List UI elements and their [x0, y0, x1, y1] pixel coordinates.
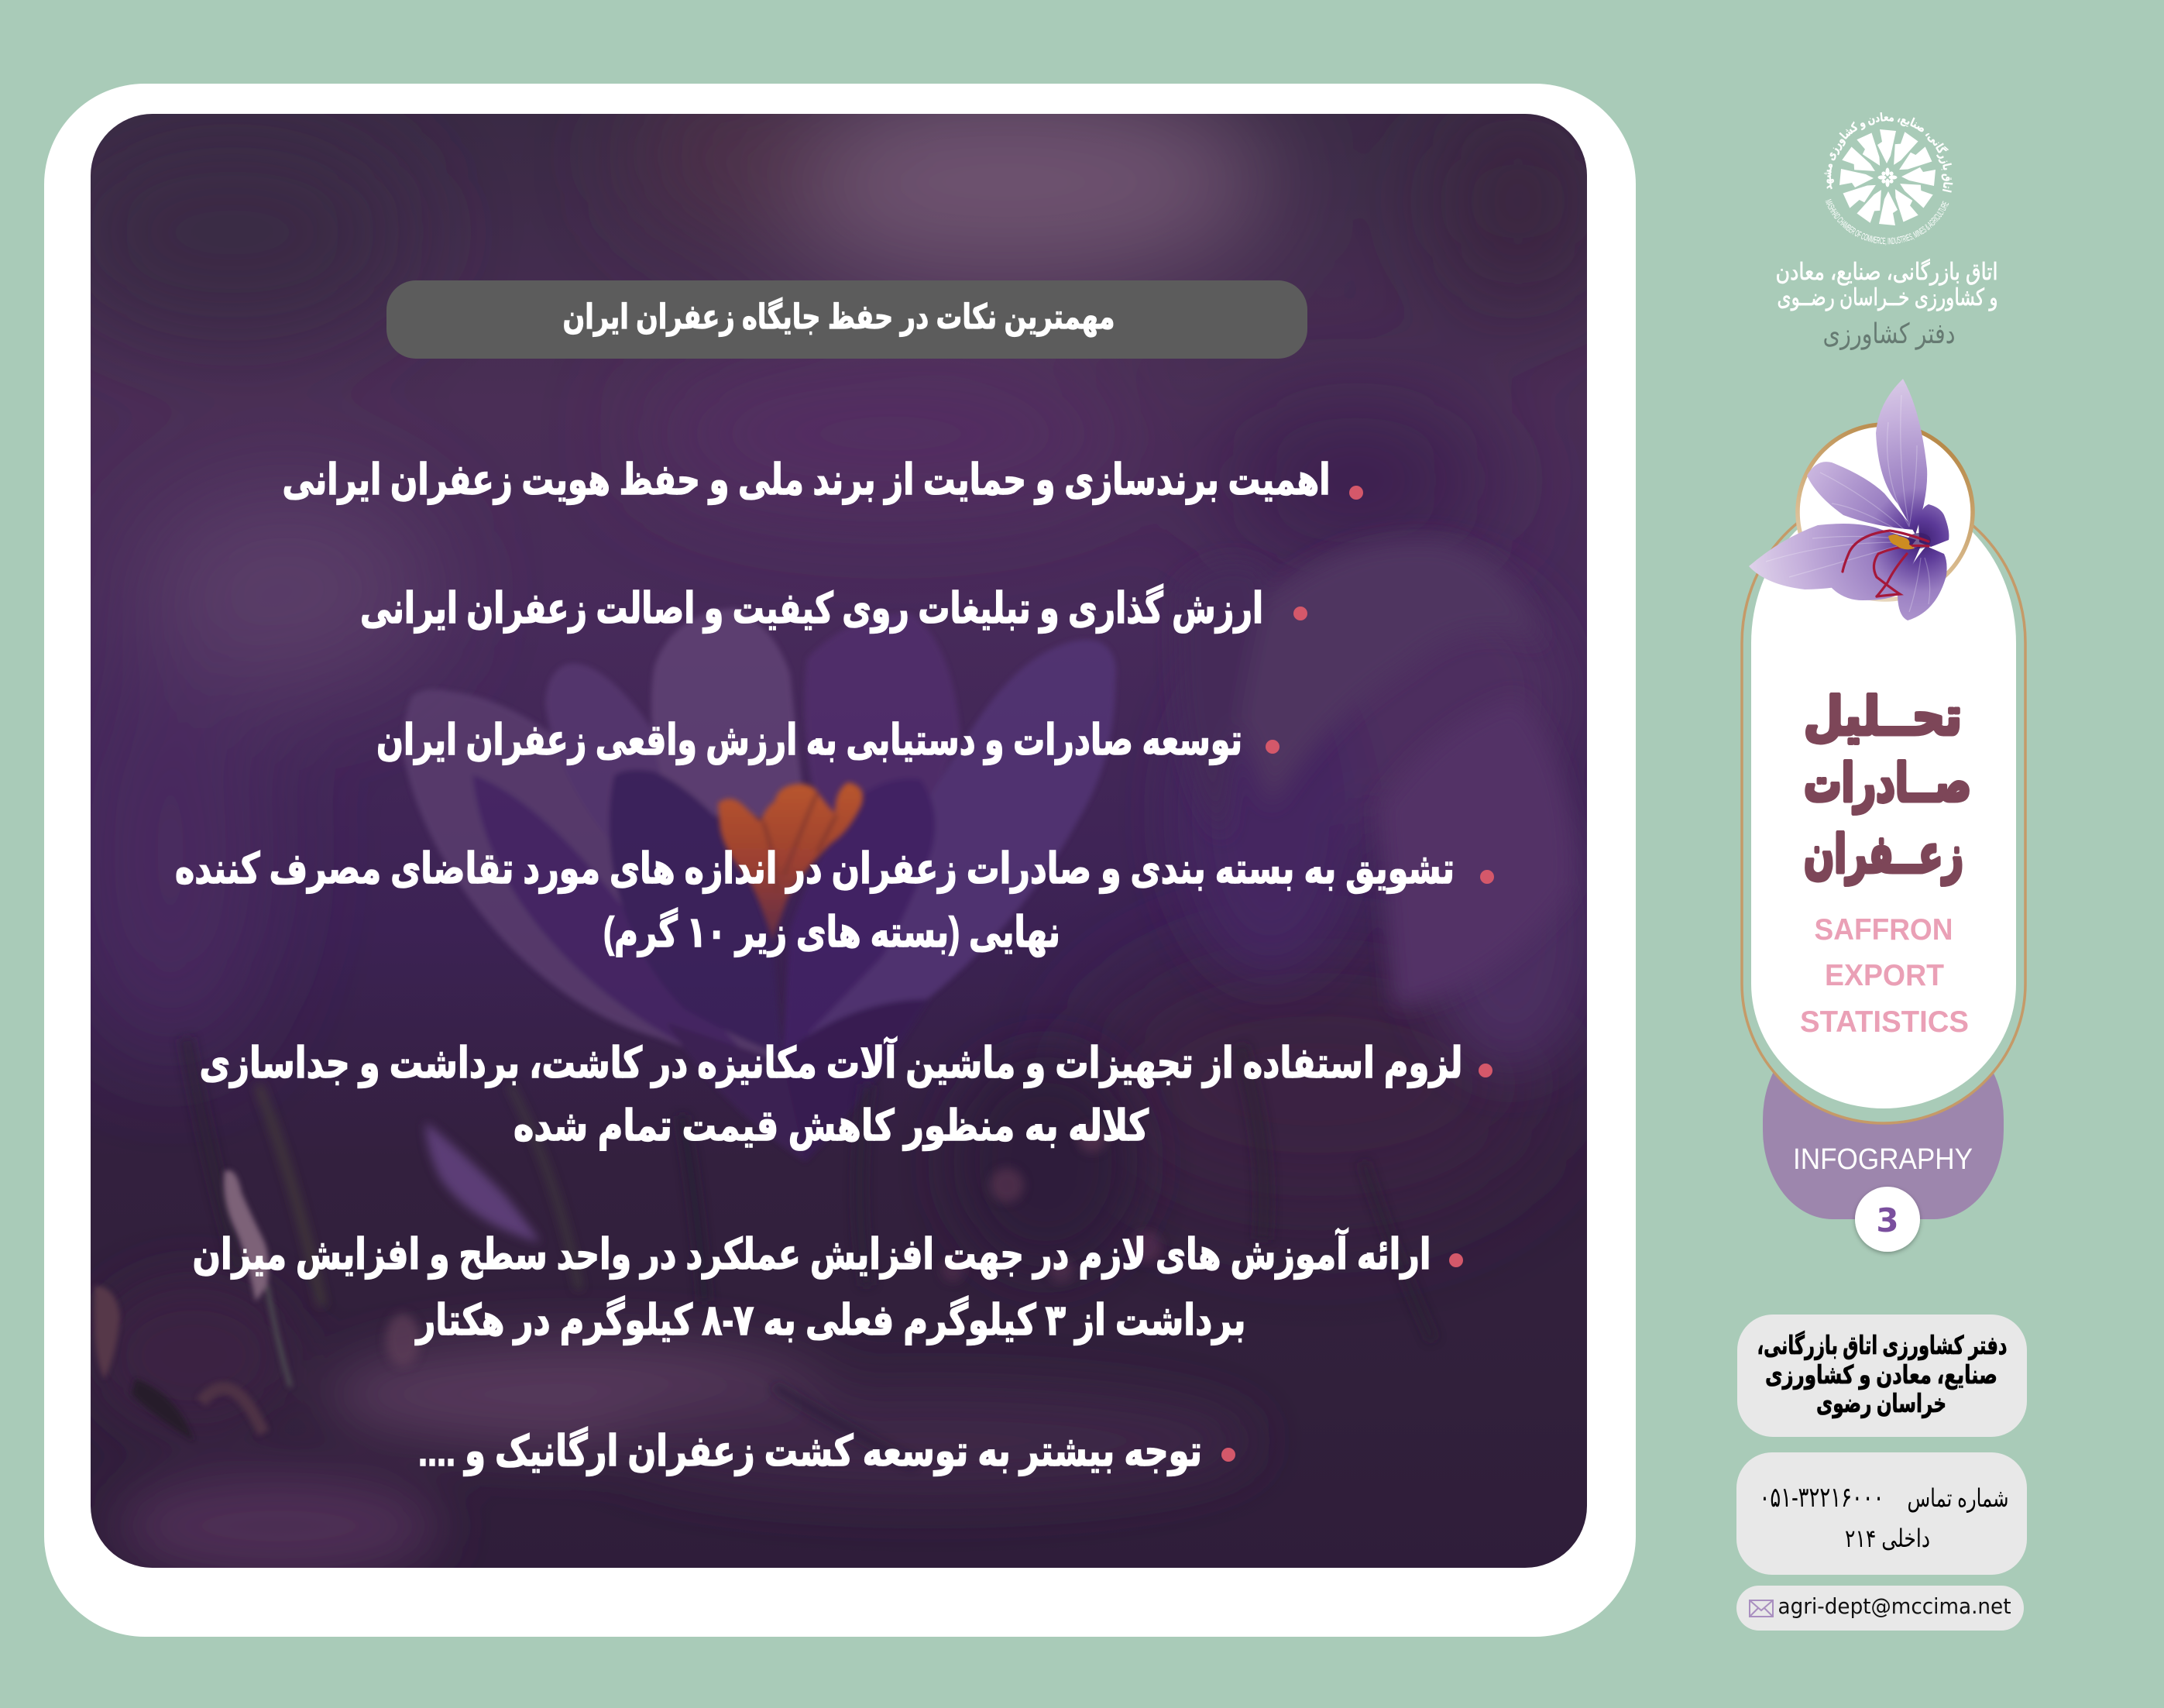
bullet 4 [175, 844, 1494, 957]
white capsule [1751, 493, 2016, 1108]
main persian title: تحــلیل [1804, 687, 1962, 746]
infographic number badge [1855, 1187, 1920, 1252]
title pill [386, 280, 1307, 359]
gold capsule outline [1742, 492, 2025, 1123]
contact box: phone [1736, 1452, 2027, 1575]
lower grass and buds [178, 1036, 1269, 1459]
pale bud on left [94, 1170, 290, 1441]
bullet 4: نهایی (بسته های زیر ۱۰ گرم) [603, 907, 1060, 957]
logo: chamber of commerce emblem: MASHHAD CHAMBER OF COMMERCE, INDUSTRIES, MINES & AGRICULTURE [1825, 198, 1949, 246]
logo: chamber of commerce emblem [1824, 112, 1953, 246]
red stigma threads [1843, 531, 1929, 596]
organisation name: و کشاورزی خــراسان رضــوی [1777, 285, 1998, 311]
contact box: office name: دفتر کشاورزی اتاق بازرگانی، [1757, 1330, 2008, 1361]
orange saffron stigma [718, 782, 863, 941]
english title: STATISTICS [1800, 1005, 1969, 1039]
gold ring with white disc [1798, 424, 1973, 600]
bullet 6: ارائه آموزش های لازم در جهت افزایش عملکرد در واحد سطح و افزایش میزان [192, 1228, 1431, 1280]
right blurred flower [1231, 541, 1571, 1010]
title pill: مهمترین نکات در حفظ جایگاه زعفران ایران [562, 297, 1115, 337]
bullet 2: ارزش گذاری و تبلیغات روی کیفیت و اصالت زعفران ایرانی [360, 583, 1263, 634]
bullet 3: توسعه صادرات و دستیابی به ارزش واقعی زعفران ایران [376, 716, 1242, 765]
english title [1800, 913, 1969, 1039]
panel: photo background of blurred crocus [54, 81, 1603, 1580]
bullet 5 [200, 1036, 1492, 1151]
logo: chamber of commerce emblem: اتاق بازرگانی، صنایع، معادن و کشاورزی مشهد [1824, 112, 1953, 193]
contact box: phone: ۰۵۱-۳۲۲۱۶۰۰۰ [1760, 1481, 1884, 1513]
icon: saffron flower [1749, 379, 1949, 620]
contact box: office name: صنایع، معادن و کشاورزی [1765, 1360, 1997, 1390]
contact box: email: agri-dept@mccima.net [1778, 1593, 2011, 1619]
english title: EXPORT [1825, 959, 1944, 992]
main persian title: زعــفران [1804, 825, 1963, 885]
contact box: phone: داخلی ۲۱۴ [1845, 1524, 1930, 1552]
bullet 5: لزوم استفاده از تجهیزات و ماشین آلات مکانیزه در کاشت، برداشت و جداسازی [200, 1036, 1462, 1088]
bullet 6 [192, 1228, 1463, 1345]
flower petal veins [1766, 395, 1930, 612]
main persian title: صــادرات [1804, 754, 1971, 814]
purple infography blob: INFOGRAPHY [1793, 1143, 1973, 1176]
organisation name [1775, 259, 1998, 311]
contact box: email [1736, 1586, 2024, 1631]
english title: SAFFRON [1814, 913, 1953, 947]
bullet 1: اهمیت برندسازی و حمایت از برند ملی و حفظ هویت زعفران ایرانی [282, 455, 1331, 505]
contact box: phone: شماره تماس [1907, 1484, 2009, 1513]
organisation name: اتاق بازرگانی، صنایع، معادن [1775, 259, 1998, 286]
purple infography blob [1763, 1030, 2004, 1219]
bullet list [175, 455, 1494, 1476]
bullet 5: کلاله به منظور کاهش قیمت تمام شده [514, 1101, 1149, 1151]
white card [44, 84, 1636, 1637]
orange stamen [1888, 534, 1915, 549]
bullet 7: توجه بیشتر به توسعه کشت زعفران ارگانیک و .... [418, 1426, 1202, 1476]
contact box: office name: خراسان رضوی [1816, 1389, 1946, 1419]
bullet 6: برداشت از ۳ کیلوگرم فعلی به ۷-۸ کیلوگرم در هکتار [414, 1295, 1245, 1345]
infographic number badge: 3 [1876, 1201, 1899, 1239]
main persian title [1804, 687, 1971, 885]
department name: دفتر کشاورزی [1823, 318, 1955, 350]
central crocus flower [402, 608, 1116, 1162]
icon: envelope [1750, 1600, 1773, 1617]
bullet 4: تشویق به بسته بندی و صادرات زعفران در اندازه های مورد تقاضای مصرف کننده [175, 844, 1455, 894]
contact box: office name [1737, 1315, 2027, 1437]
